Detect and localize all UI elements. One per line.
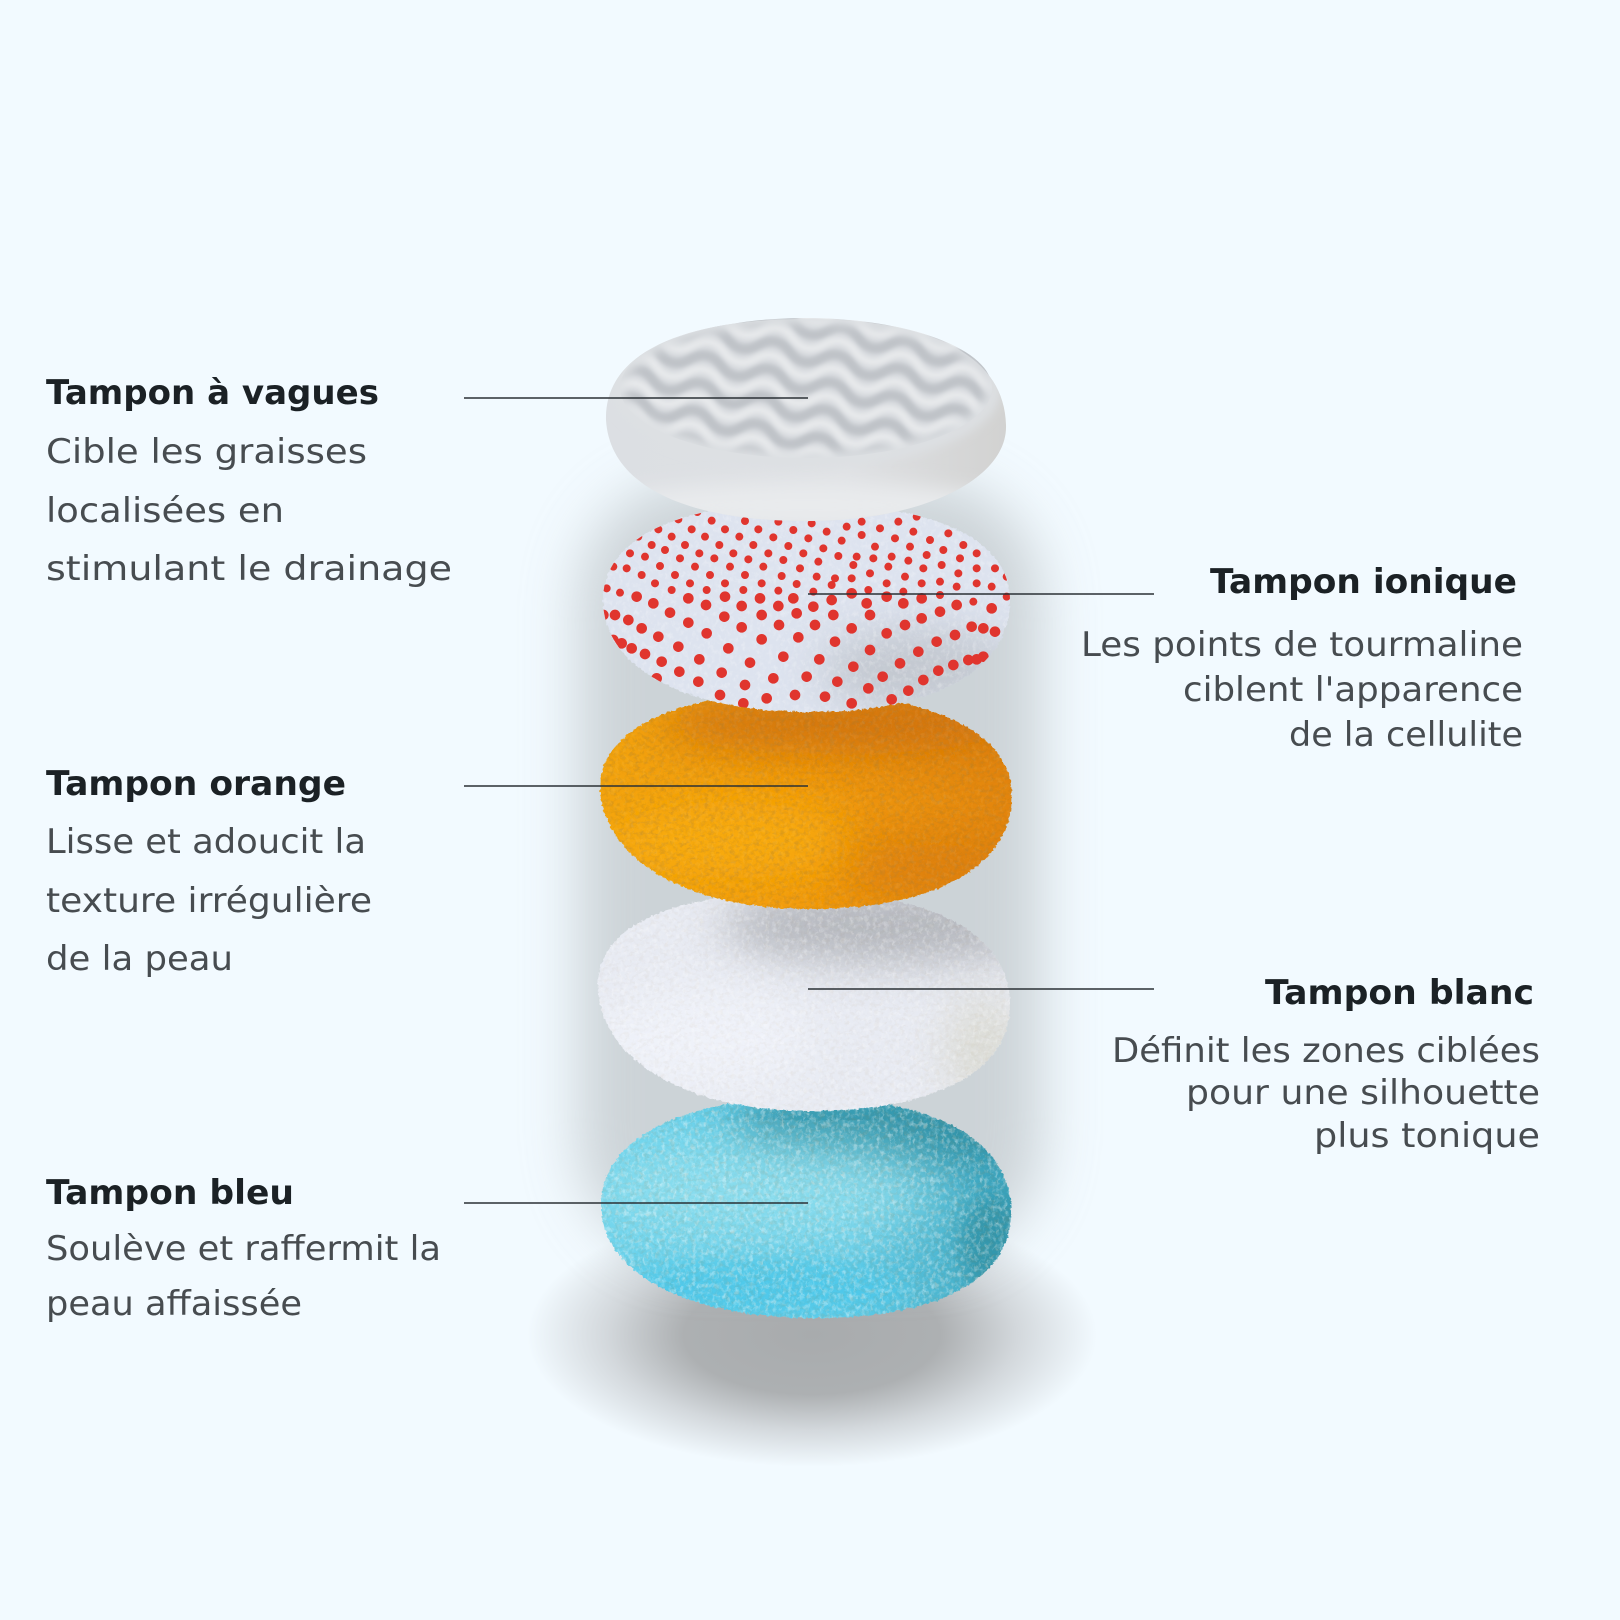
label: wave pad: Tampon à vagues — [46, 373, 379, 413]
wave top surface — [624, 318, 989, 455]
label: wave pad: Cible les graisses — [46, 432, 367, 472]
label: wave pad: stimulant le drainage — [46, 549, 452, 589]
label: orange pad: de la peau — [46, 939, 233, 979]
drop shadow behind stack — [527, 480, 1097, 1467]
label: blue pad: peau affaissée — [46, 1284, 302, 1324]
leader line: wave pad — [464, 397, 808, 399]
pad: ionic with red dots — [602, 511, 1010, 713]
leader line: orange pad — [464, 785, 808, 787]
label: orange pad: Lisse et adoucit la — [46, 822, 366, 862]
label: orange pad: Tampon orange — [46, 764, 346, 804]
label: blue pad: Tampon bleu — [46, 1173, 294, 1213]
label: ionic pad — [1081, 562, 1523, 755]
label: white pad: pour une silhouette — [1186, 1073, 1540, 1113]
leader line: white pad — [808, 988, 1154, 990]
label: orange pad: texture irrégulière — [46, 881, 372, 921]
label: blue pad: Soulève et raffermit la — [46, 1229, 441, 1269]
leader line: blue pad — [464, 1202, 808, 1204]
pad: wave silicone — [606, 318, 1006, 521]
label: wave pad: localisées en — [46, 491, 284, 531]
label: ionic pad: ciblent l'apparence — [1183, 670, 1523, 710]
label: white pad — [1112, 973, 1540, 1156]
red tourmaline dots — [603, 510, 1007, 703]
pad: blue — [600, 1103, 1012, 1319]
pad: orange — [599, 700, 1012, 910]
label: ionic pad: Les points de tourmaline — [1081, 625, 1523, 665]
label: orange pad — [46, 764, 372, 979]
label: white pad: Tampon blanc — [1265, 973, 1534, 1013]
label: blue pad — [46, 1173, 441, 1324]
pad: white — [597, 898, 1010, 1112]
label: white pad: Définit les zones ciblées — [1112, 1031, 1540, 1071]
label: white pad: plus tonique — [1314, 1116, 1540, 1156]
leader line: ionic pad — [808, 593, 1154, 595]
label: wave pad — [46, 373, 452, 589]
label: ionic pad: Tampon ionique — [1210, 562, 1517, 602]
label: ionic pad: de la cellulite — [1289, 715, 1523, 755]
